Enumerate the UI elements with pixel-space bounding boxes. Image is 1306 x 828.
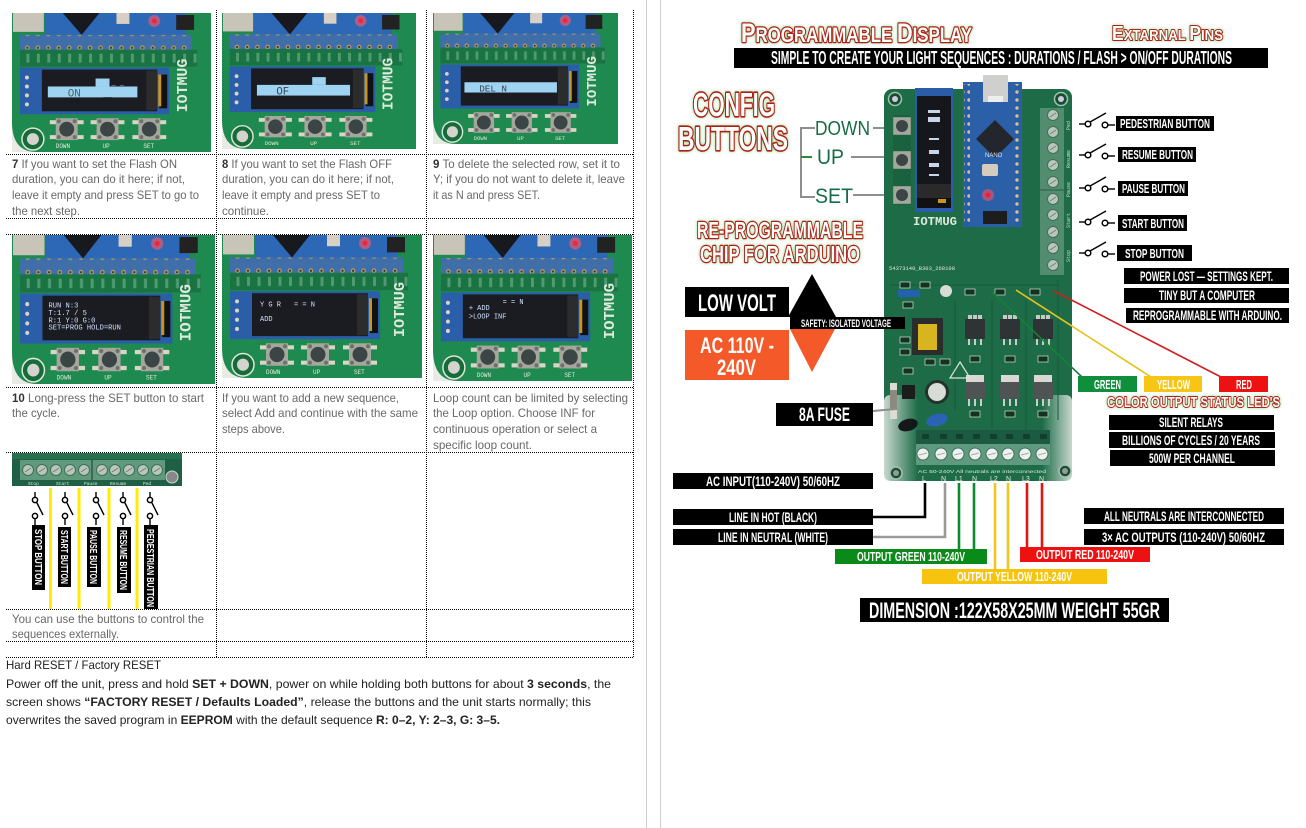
arduino nano — [963, 75, 1022, 227]
power components — [890, 285, 970, 433]
heading: re-programmable chip — [697, 217, 863, 267]
photo: step 10 run: SET=PROG HOLD=RUN — [49, 325, 121, 333]
photo: external button terminals: Start — [56, 481, 70, 487]
output labels: OUTPUT RED 110-240V — [1036, 547, 1134, 562]
text block: hard reset instructions — [6, 658, 611, 727]
text: step 10: the cycle. — [12, 406, 60, 420]
board silk text — [889, 215, 957, 272]
neutral notes — [1084, 508, 1284, 545]
text: step 8: 8 If you want to set the Flash OFF — [222, 157, 392, 171]
text: loop count: specific loop count. — [433, 438, 532, 452]
photo: external button terminals: Stop — [28, 481, 39, 487]
feature list: relays: SILENT RELAYS — [1159, 414, 1223, 430]
photo: step 10 run: DOWN — [57, 375, 71, 382]
feature list: relays: 500W PER CHANNEL — [1149, 450, 1235, 466]
text: external buttons note: You can use the buttons to control the — [12, 612, 204, 626]
photo: step 7 flash on: DOWN — [56, 143, 71, 150]
photo: step 7 flash on: _ _ — [110, 79, 125, 87]
text: external buttons note — [12, 612, 204, 641]
text: step 8: continue. — [222, 204, 269, 218]
text: step 10: 10 Long-press the SET button to start — [12, 391, 205, 405]
page gutter — [646, 0, 660, 828]
heading: re-programmable chip: RE-PROGRAMMABLE — [697, 217, 863, 243]
text: step 8: duration, you can do it here; if not, — [222, 172, 394, 186]
photo: step 8 flash off: DOWN — [265, 140, 279, 147]
fuse label: 8A FUSE — [799, 405, 850, 426]
terminal block: outputs: L — [922, 476, 926, 483]
photo: step 9 delete row: UP — [517, 135, 524, 142]
photo: add sequence: ADD — [260, 316, 273, 324]
photo: external button terminals — [12, 453, 182, 487]
photo: add sequence: Y G R — [260, 301, 282, 310]
terminal block: outputs: N — [972, 476, 977, 483]
text: step 7: 7 If you want to set the Flash ON — [12, 157, 177, 171]
voltage safety graphic: AC 110V - — [700, 333, 774, 358]
terminal block: inputs: Resume — [1066, 150, 1072, 168]
terminal block: outputs: N — [1006, 476, 1011, 483]
vertical button labels: RESUME BUTTON — [117, 530, 128, 590]
output labels: OUTPUT YELLOW 110-240V — [957, 569, 1072, 584]
photo: step 8 flash off: OF — [276, 87, 289, 99]
photo: step 10 run: IOTMUG — [178, 284, 196, 341]
board silk text: 54373140_B303_260108 — [889, 266, 955, 272]
terminal block: inputs: Ped — [1066, 121, 1072, 130]
ac input labels: LINE IN HOT (BLACK) — [729, 509, 817, 525]
table grid — [6, 10, 634, 658]
photo: step 9 delete row: DEL N — [479, 84, 507, 95]
vertical button labels: STOP BUTTON — [32, 529, 43, 585]
text: add sequence: select Add and continue with the same — [222, 406, 418, 420]
photo: step 7 flash on: ON — [68, 88, 81, 100]
external button list: START BUTTON — [1122, 216, 1184, 231]
oled display — [915, 88, 953, 212]
photo: add sequence — [222, 235, 422, 378]
photo: step 10 run: SET — [146, 375, 157, 382]
photo: loop option: = = N — [503, 299, 524, 307]
terminal block: outputs: L3 — [1022, 476, 1030, 483]
external button list: RESUME BUTTON — [1122, 147, 1193, 162]
output labels: OUTPUT GREEN 110-240V — [857, 549, 965, 564]
circuit board — [884, 75, 1072, 483]
photo: add sequence: IOTMUG — [391, 282, 409, 337]
button labels with bracket: DOWN — [815, 118, 870, 140]
led colour tags: GREEN — [1094, 377, 1121, 392]
text: loop count — [433, 391, 628, 452]
text: step 9: it as N and press SET. — [433, 188, 540, 202]
photo: loop option: SET — [564, 372, 575, 379]
voltage safety graphic — [685, 274, 905, 380]
led colour tags: YELLOW — [1157, 377, 1190, 392]
status led leader lines — [992, 290, 1221, 377]
output labels — [835, 547, 1150, 584]
led colour tags — [1078, 376, 1268, 392]
board silk text: IOTMUG — [913, 215, 957, 229]
terminal block: outputs: L2 — [990, 476, 998, 483]
text: step 7: the next step. — [12, 204, 80, 218]
ac input labels — [673, 473, 873, 545]
photo: external button terminals: Pause — [84, 481, 98, 487]
photo: step 8 flash off: IOTMUG — [382, 57, 398, 110]
terminal block: outputs: L1 — [955, 476, 963, 483]
yellow wires — [49, 488, 138, 609]
photo: step 10 run: T:1.7 / 5 — [49, 310, 87, 318]
photo: step 9 delete row — [433, 13, 618, 144]
external button list: PAUSE BUTTON — [1122, 181, 1185, 196]
text: step 9 — [433, 157, 625, 202]
button labels with bracket: UP — [817, 146, 844, 169]
text: step 7: leave it empty and press SET to go to — [12, 188, 199, 202]
text: add sequence: If you want to add a new sequence, — [222, 391, 399, 405]
text: step 9: 9 To delete the selected row, set it to — [433, 157, 620, 171]
text: step 8: leave it empty and press SET to — [222, 188, 380, 202]
voltage safety graphic: SAFETY: ISOLATED VOLTAGE — [801, 318, 891, 330]
vertical button labels: PEDESTRIAN BUTTON — [144, 529, 155, 607]
text block: hard reset instructions: Power off the unit, press and hold SET + DOWN, power on while holding both buttons for about 3 seconds, the — [6, 677, 611, 691]
text: step 10 — [12, 391, 205, 420]
text: step 7 — [12, 157, 199, 218]
photo: step 8 flash off — [222, 13, 416, 149]
text: loop count: Loop count can be limited by selecting — [433, 391, 628, 405]
panel: wiring diagram — [673, 18, 1289, 623]
photo: step 8 flash off: UP — [310, 140, 318, 147]
switch symbols — [32, 492, 158, 525]
photo: step 7 flash on: UP — [103, 143, 110, 150]
button labels with bracket — [801, 118, 888, 208]
heading: external pins: EXTARNAL PINS — [1112, 23, 1223, 45]
heading: config buttons — [678, 86, 788, 157]
terminal block: inputs: Start — [1066, 213, 1072, 228]
photo: add sequence: = = N — [294, 301, 315, 310]
photo: step 10 run: R:1 Y:0 G:0 — [49, 317, 95, 325]
terminal block: outputs: N — [1039, 476, 1044, 483]
terminal block: inputs: Stop — [1066, 250, 1072, 262]
text: add sequence: steps above. — [222, 422, 285, 436]
photo: loop option: IOTMUG — [601, 283, 619, 339]
external button list: STOP BUTTON — [1125, 246, 1184, 261]
photo: step 9 delete row: SET — [555, 135, 566, 142]
text block: hard reset instructions: screen shows “FACTORY RESET / Defaults Loaded” , release the buttons and the unit starts normally; this — [6, 695, 591, 709]
text: step 7: duration, you can do it here; if not, — [12, 172, 185, 186]
photo: step 7 flash on: __ — [103, 91, 113, 99]
photo: step 10 run: RUN N:3 — [49, 302, 78, 310]
photo: loop option: + ADD — [469, 305, 490, 313]
photo: external button terminals: Ped — [143, 481, 151, 487]
photo: add sequence: UP — [313, 369, 321, 376]
photo: step 7 flash on: IOTMUG — [176, 59, 192, 112]
text: loop count: continuous operation or select a — [433, 422, 597, 436]
heading: config buttons: BUTTONS — [678, 120, 788, 157]
terminal block: outputs — [916, 430, 1050, 483]
photo: add sequence: SET — [354, 369, 365, 376]
text: external buttons note: sequences externally. — [12, 627, 119, 641]
terminal block: outputs: AC 50-240V All neutrals are interconnected — [918, 469, 1047, 474]
photo: loop option: >LOOP INF — [469, 313, 506, 321]
mosfet relays — [965, 315, 1053, 406]
voltage safety graphic: LOW VOLT — [698, 290, 776, 317]
heading: programmable display: PROGRAMMABLE DISPLAY — [741, 18, 972, 48]
text: step 9: Y; if you do not want to delete it, leave — [433, 172, 625, 186]
external button list — [1079, 113, 1214, 261]
text: loop count: the Loop option. Choose INF for — [433, 406, 595, 420]
feature list: computer — [1124, 268, 1289, 323]
text: add sequence — [222, 391, 418, 436]
config buttons on board — [893, 115, 911, 205]
heading: config buttons: CONFIG — [693, 86, 775, 123]
photo: loop option: DOWN — [477, 372, 491, 379]
photo: loop option: UP — [524, 372, 531, 379]
dimension banner — [860, 598, 1169, 623]
photo: add sequence: DOWN — [266, 369, 281, 376]
photo: step 7 flash on — [12, 13, 211, 152]
panel: manual table — [6, 10, 634, 658]
text block: hard reset instructions: Hard RESET / Factory RESET — [6, 658, 162, 672]
heading: re-programmable chip: CHIP FOR ARDUINO — [700, 241, 860, 267]
fuse label — [776, 403, 896, 426]
ac input labels: AC INPUT(110-240V) 50/60HZ — [706, 473, 840, 489]
vertical button labels — [32, 525, 158, 609]
dimension banner: DIMENSION :122X58X25MM WEIGHT 55GR — [869, 598, 1160, 623]
terminal block: inputs: Pause — [1066, 182, 1072, 197]
ac input labels: LINE IN NEUTRAL (WHITE) — [718, 529, 828, 545]
photo: step 9 delete row: DOWN — [474, 135, 487, 142]
photo: step 8 flash off: SET — [350, 140, 361, 147]
ac wires — [873, 483, 1042, 569]
photo: step 10 run: UP — [104, 375, 112, 382]
arduino nano: NANO — [985, 153, 1003, 159]
voltage safety graphic: 240V — [717, 355, 756, 380]
photo: loop option — [433, 235, 632, 381]
photo: step 10 run — [12, 235, 215, 384]
vertical button labels: START BUTTON — [58, 530, 69, 584]
text: step 8 — [222, 157, 394, 218]
button labels with bracket: SET — [815, 185, 853, 208]
vertical button labels: PAUSE BUTTON — [87, 530, 98, 584]
feature list: relays — [1109, 414, 1275, 466]
photo: step 9 delete row: IOTMUG — [585, 56, 601, 107]
photo: step 7 flash on: SET — [143, 143, 154, 150]
terminal block: outputs: N — [941, 476, 946, 483]
small components — [900, 282, 1048, 417]
terminal block: inputs — [1040, 108, 1072, 275]
external button list: PEDESTRIAN BUTTON — [1120, 116, 1210, 131]
photo: external button terminals: Resume — [110, 481, 127, 487]
led colour tags: RED — [1236, 377, 1252, 392]
text block: hard reset instructions: overwrites the saved program in EEPROM with the default sequence R: 0–2, Y: 2–3, G: 3–5. — [6, 713, 500, 727]
